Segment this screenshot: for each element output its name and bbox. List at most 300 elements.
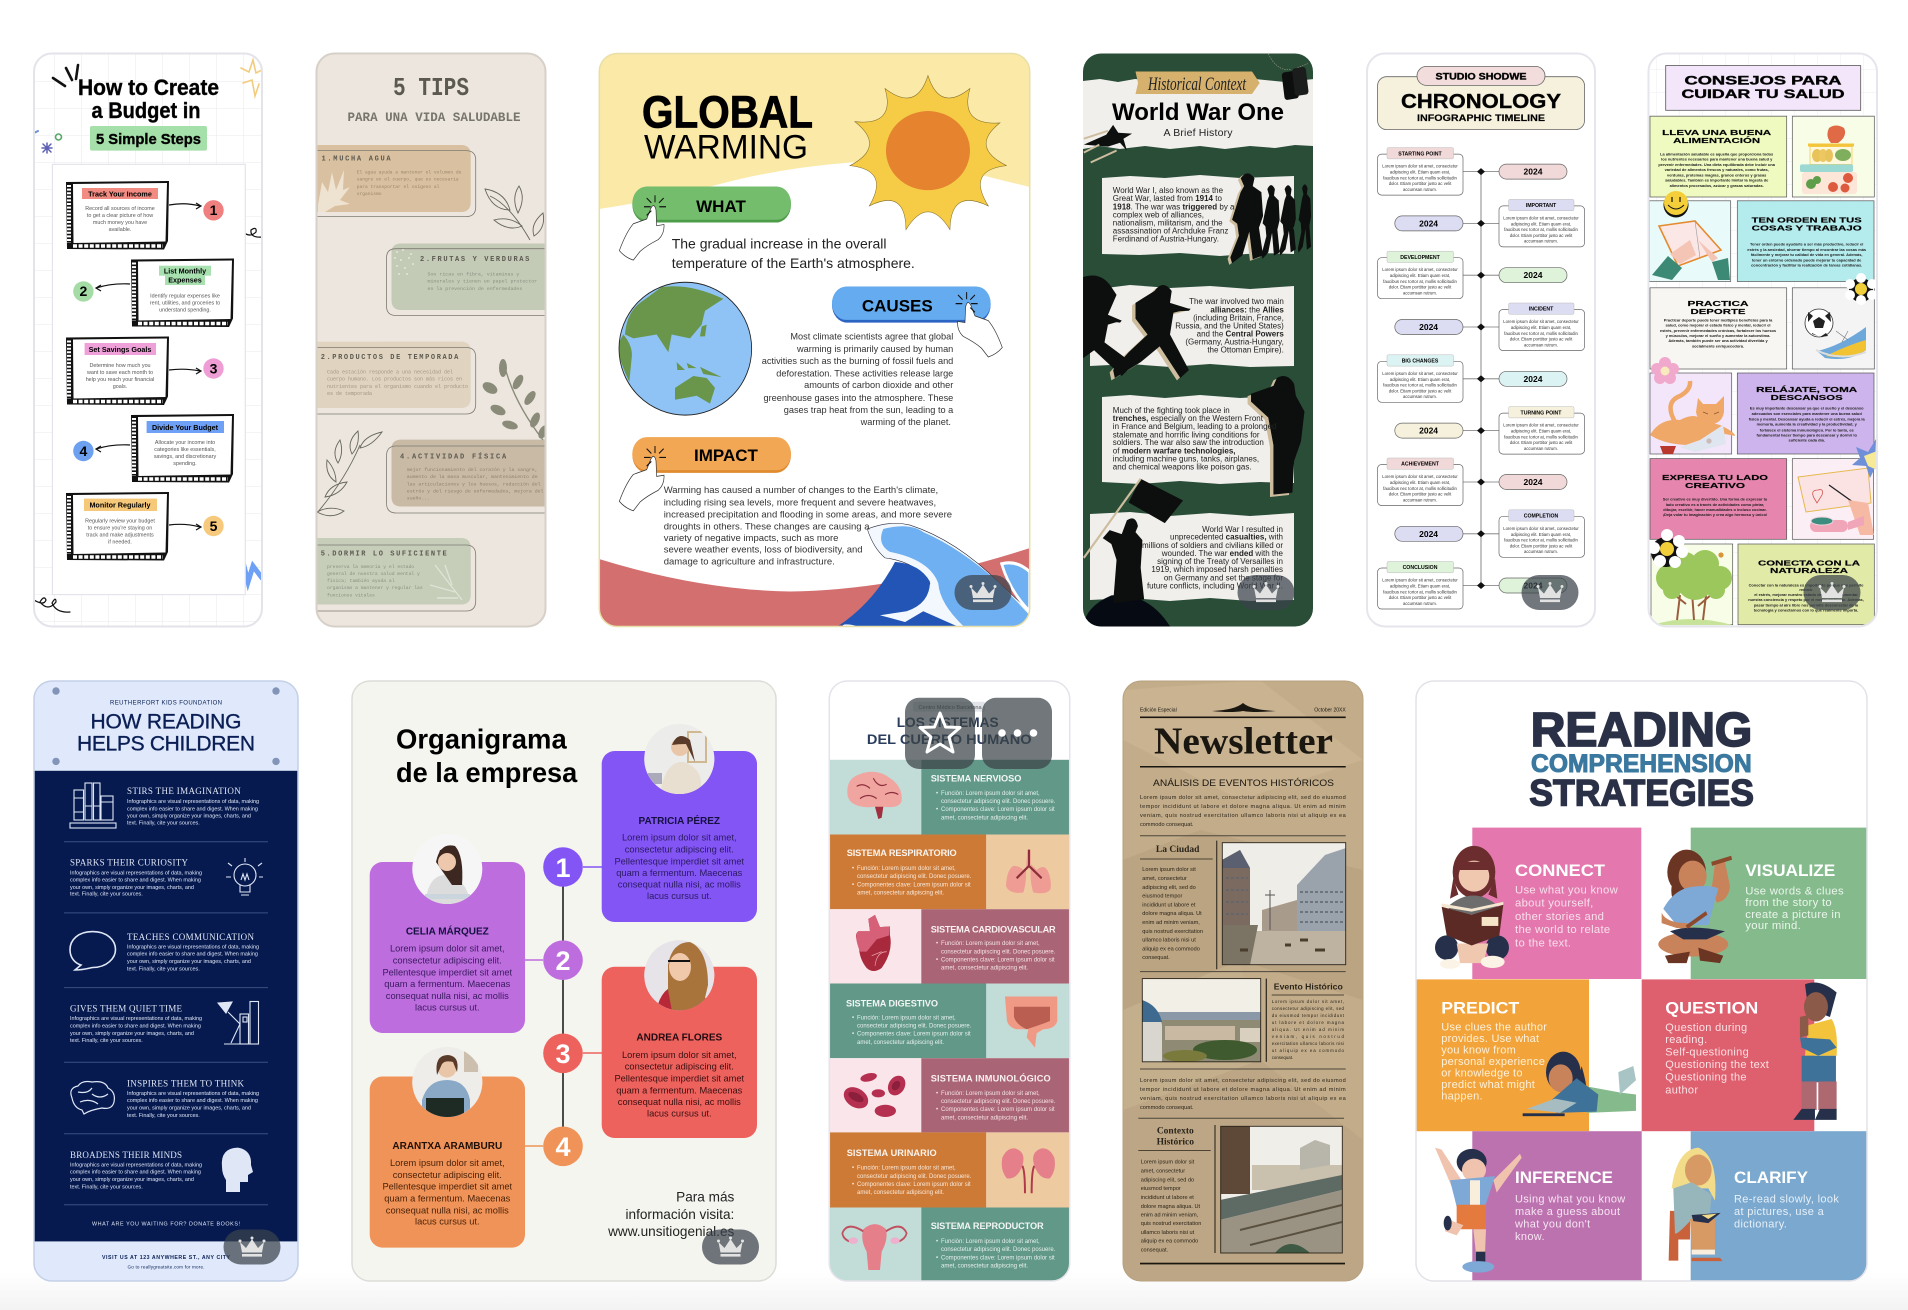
what text: The gradual increase in the overall bbox=[672, 236, 886, 252]
node 2 bbox=[1395, 199, 1584, 247]
intro paragraph: Lorem ipsum dolor sit amet, consectetur adipiscing elit, sed do eiusmod bbox=[1140, 795, 1346, 801]
row 1: your own, simply organize your images, charts, and bbox=[127, 813, 251, 819]
row: respiratorio: amet, consectetur adipiscing elit. bbox=[857, 890, 944, 896]
person card: arantxa: Lorem ipsum dolor sit amet, bbox=[390, 1158, 505, 1168]
tip 2 bbox=[386, 244, 546, 316]
node 8: adipiscing elit. Etiam quam erat, bbox=[1511, 532, 1571, 537]
contexto histórico column: aliquip ex ea commodo bbox=[1141, 1239, 1198, 1245]
node 5: adipiscing elit. Etiam quam erat, bbox=[1390, 377, 1450, 382]
la ciudad column bbox=[1140, 841, 1217, 969]
strategy: clarify: dictionary. bbox=[1734, 1219, 1787, 1231]
tip 4: aumento de la masa muscular, mantenimiento de bbox=[407, 474, 538, 480]
row 3: Infographics are visual representations of data, making bbox=[127, 944, 259, 950]
ww1 paragraphs: of modern warfare technologies, bbox=[1113, 446, 1236, 456]
row: cardiovascular: Componentes clave: Lorem ipsum dolor sit bbox=[941, 957, 1055, 963]
node 8: dolor. Etiam porttitor justo ac velit bbox=[1510, 543, 1573, 548]
step 5: if needed. bbox=[108, 540, 132, 546]
newsletter masthead bbox=[1140, 703, 1346, 789]
health title: CUIDAR TU SALUD bbox=[1682, 89, 1844, 101]
tips title: PARA UNA VIDA SALUDABLE bbox=[348, 110, 521, 125]
tip 5: funciones vitales bbox=[327, 592, 375, 598]
strategy: visualize: Use words & clues bbox=[1745, 886, 1844, 898]
person card: celia: quam a fermentum. Maecenas bbox=[384, 979, 511, 989]
evento histórico column: Evento Histórico bbox=[1274, 982, 1343, 992]
strategy: question: Questioning the bbox=[1665, 1072, 1747, 1084]
tip: alimentación: los nutrientes necesarios para mantener una buena salud y bbox=[1661, 157, 1773, 162]
row: urinario: • bbox=[852, 1166, 854, 1172]
contexto histórico column: ullamco laboris nisi ut bbox=[1141, 1230, 1195, 1236]
step 5: Regularly review your budget bbox=[85, 518, 155, 524]
row: urinario: consectetur adipiscing elit. Donec posuere. bbox=[857, 1174, 972, 1180]
row: reproductor: • bbox=[936, 1255, 938, 1261]
illustration: girl on chair bbox=[1669, 1148, 1723, 1261]
step 5 bbox=[66, 492, 224, 560]
tip: naturaleza: CONECTA CON LA bbox=[1758, 558, 1861, 567]
tip 4: mejor funcionamiento del corazón y la sangre, bbox=[407, 467, 538, 473]
row: respiratorio: consectetur adipiscing elit. Donec posuere. bbox=[857, 874, 972, 880]
tip: creativo: Ser creativo es muy divertido. Una forma de expresar tu bbox=[1663, 497, 1768, 502]
step 4 marker bbox=[543, 1126, 583, 1166]
icon: pink flower bbox=[1651, 357, 1679, 384]
sun bbox=[850, 75, 1007, 230]
strategy: inference: know. bbox=[1515, 1231, 1545, 1243]
node 5: faucibus nec tortor at, mollis sollicitudin bbox=[1383, 383, 1457, 388]
row: digestivo: amet, consectetur adipiscing elit. bbox=[857, 1040, 944, 1046]
contexto histórico column: Lorem ipsum dolor sit bbox=[1141, 1160, 1195, 1166]
node 1: accumsan rutrum. bbox=[1403, 187, 1437, 192]
intro paragraph bbox=[1140, 795, 1347, 828]
row: nervioso: • bbox=[936, 807, 938, 813]
ww1 paragraphs bbox=[1113, 186, 1284, 590]
tip 1: organismo bbox=[357, 191, 382, 197]
tip: orden: estrés y la ansiedad, ahorrar tiempo al encontrar las cosas más bbox=[1747, 247, 1867, 252]
node 1: faucibus nec tortor at, mollis sollicitudin bbox=[1383, 175, 1457, 180]
node 1: 2024 bbox=[1524, 167, 1543, 177]
row: nervioso: • bbox=[936, 791, 938, 797]
tip 1 bbox=[316, 145, 476, 217]
node 4: adipiscing elit. Etiam quam erat, bbox=[1511, 325, 1571, 330]
node 5: BIG CHANGES bbox=[1402, 358, 1439, 364]
tips title: 5 TIPS bbox=[393, 73, 469, 103]
la ciudad column: La Ciudad bbox=[1156, 845, 1200, 855]
tip 4 bbox=[386, 440, 546, 513]
panel: budget steps bbox=[34, 53, 262, 627]
icon: speech bubble bbox=[70, 932, 116, 970]
row: nervioso: SISTEMA NERVIOSO bbox=[931, 773, 1021, 783]
person card: celia: Pellentesque imperdiet sit amet bbox=[382, 967, 513, 977]
contexto histórico column bbox=[1138, 1125, 1215, 1254]
evento histórico column: consequat. bbox=[1272, 1055, 1293, 1060]
tip: deporte: socialmente enriquecedora. bbox=[1692, 344, 1744, 349]
tip: alimentación: saludables. También es importante limitar la ingesta de bbox=[1665, 178, 1769, 183]
step 3 marker bbox=[543, 1034, 583, 1073]
row: digestivo: consectetur adipiscing elit. Donec posuere. bbox=[857, 1024, 972, 1030]
evento histórico column: exercitation ullamco laboris nisi bbox=[1272, 1041, 1344, 1046]
icon: daisy bottom bbox=[1648, 529, 1688, 568]
tip: naturaleza: nuestra conciencia y respeto por el medio ambiente. Además, bbox=[1748, 597, 1864, 602]
panel: health tips bbox=[1648, 53, 1878, 627]
impact text: Warming has caused a number of changes to the Earth's climate, bbox=[664, 485, 938, 496]
row: respiratorio: Componentes clave: Lorem ipsum dolor sit bbox=[857, 882, 971, 888]
tip 2: minerales y tienen un papel protector bbox=[428, 279, 537, 285]
contact text: www.unsitiogenial.es bbox=[607, 1224, 735, 1239]
row 5: complex info easier to share and digest. When making bbox=[127, 1098, 258, 1104]
health title bbox=[1666, 66, 1861, 110]
ww1 paragraphs: World War I, also known as the bbox=[1113, 186, 1224, 195]
step 2: Identify regular expenses like bbox=[150, 294, 220, 300]
strategy: inference: Using what you know bbox=[1515, 1194, 1626, 1206]
person card: patricia: Pellentesque imperdiet sit amet bbox=[614, 856, 745, 866]
tip: descansos: Es muy importante descansar ya que el sueño y el descanso bbox=[1750, 406, 1864, 411]
tip: descansos: suficiente cada día. bbox=[1789, 437, 1825, 442]
decorative doodles bbox=[34, 60, 262, 612]
tip 5: 5.DORMIR LO SUFICIENTE bbox=[321, 550, 448, 558]
strategy: predict: you know from bbox=[1441, 1045, 1516, 1057]
strategy: clarify bbox=[1691, 1131, 1867, 1281]
what text: temperature of the Earth's atmosphere. bbox=[672, 255, 915, 271]
node 1: dolor. Etiam porttitor justo ac velit bbox=[1389, 181, 1452, 186]
strategy: visualize bbox=[1691, 828, 1867, 979]
sistemas title: DEL CUERPO HUMANO bbox=[867, 731, 1032, 747]
tip: alimentación: prevenir enfermedades. Una dieta equilibrada debe incluir una bbox=[1658, 162, 1776, 167]
rules bbox=[1138, 836, 1346, 1118]
impact pill: IMPACT bbox=[694, 446, 759, 465]
row 3: complex info easier to share and digest. When making bbox=[127, 951, 258, 957]
tip: creativo: EXPRESA TU LADO bbox=[1662, 473, 1768, 482]
tip 5 bbox=[316, 538, 476, 611]
tip: alimentación: La alimentación saludable es aquella que proporciona todos bbox=[1660, 151, 1774, 156]
node 4: faucibus nec tortor at, mollis sollicitudin bbox=[1504, 331, 1578, 336]
icon: blue star bbox=[1852, 439, 1877, 478]
tip: descansos: RELÁJATE, TOMA bbox=[1756, 385, 1858, 394]
impact text: increased precipitation and flooding in some areas, and more severe bbox=[664, 510, 952, 520]
la ciudad column: Lorem ipsum dolor sit bbox=[1142, 867, 1196, 873]
photo: elevated train bbox=[1220, 1126, 1343, 1254]
row: urinario: Componentes clave: Lorem ipsum dolor sit bbox=[857, 1182, 971, 1188]
tip 1: 1.MUCHA AGUA bbox=[322, 156, 392, 164]
la ciudad column: eiusmod tempor bbox=[1142, 893, 1183, 899]
person card: arantxa: ARANTXA ARAMBURU bbox=[392, 1141, 502, 1152]
strategy: question: QUESTION bbox=[1665, 999, 1758, 1018]
la ciudad column: aliquip ex ea commodo bbox=[1142, 946, 1200, 952]
illustration: tree bbox=[1651, 544, 1733, 625]
tip: descansos: fortalece el sistema inmunológico. Por lo tanto, es bbox=[1760, 427, 1855, 432]
panel: newsletter bbox=[1123, 680, 1363, 1281]
step 4: Divide Your Budget bbox=[152, 423, 219, 432]
strategy: predict: provides. Use what bbox=[1441, 1033, 1539, 1045]
organ: blood cells bbox=[841, 1072, 909, 1117]
step 2 marker: 2 bbox=[555, 946, 571, 976]
node 9: CONCLUSION bbox=[1403, 565, 1438, 571]
premium badge bbox=[224, 1230, 280, 1264]
reading title: HOW READING bbox=[90, 710, 242, 733]
organigrama title: de la empresa bbox=[396, 757, 578, 788]
row: nervioso: Función: Lorem ipsum dolor sit amet, bbox=[941, 791, 1040, 797]
row 2: text. Finally, cite your sources. bbox=[70, 892, 143, 898]
ww1 paragraphs: complex web of alliances, bbox=[1113, 210, 1204, 219]
strategy: inference: INFERENCE bbox=[1515, 1168, 1613, 1187]
node 6: faucibus nec tortor at, mollis sollicitudin bbox=[1504, 434, 1578, 439]
label: historical context bbox=[1136, 72, 1260, 95]
ww1 paragraphs: millions of soldiers and civilians killed or bbox=[1142, 541, 1283, 550]
what pill bbox=[619, 187, 791, 260]
newsletter masthead: Newsletter bbox=[1154, 721, 1333, 763]
torn paper header bbox=[1083, 78, 1314, 149]
step 5: track and make adjustments bbox=[86, 532, 154, 538]
row: inmunológico: SISTEMA INMUNOLÓGICO bbox=[931, 1072, 1051, 1083]
node 6: TURNING POINT bbox=[1521, 410, 1562, 416]
strategy: predict: PREDICT bbox=[1441, 999, 1520, 1018]
tip: descansos: adecuados son esenciales para mantener una buena salud bbox=[1752, 411, 1862, 416]
tip 2: Son ricas en fibra, vitaminas y bbox=[428, 272, 519, 278]
person card: celia: consectetur adipiscing elit. bbox=[393, 956, 502, 966]
ww1 paragraphs: wounded. The war ended with the bbox=[1162, 549, 1283, 558]
organ: lungs bbox=[1006, 850, 1051, 893]
newsletter masthead: ANÁLISIS DE EVENTOS HISTÓRICOS bbox=[1153, 778, 1334, 789]
person card: andrea: lacus cursus ut. bbox=[647, 1108, 712, 1118]
person card: patricia bbox=[602, 724, 757, 922]
person card: arantxa: quam a fermentum. Maecenas bbox=[384, 1193, 511, 1203]
causes text: Most climate scientists agree that global bbox=[790, 332, 953, 342]
row: inmunológico: • bbox=[936, 1091, 938, 1097]
reading strategies title: STRATEGIES bbox=[1529, 772, 1754, 814]
ww1 paragraphs: Much of the fighting took place in bbox=[1113, 406, 1230, 415]
row 6: complex info easier to share and digest. When making bbox=[70, 1169, 201, 1175]
person card: andrea: ANDREA FLORES bbox=[636, 1033, 722, 1044]
second paragraph: Lorem ipsum dolor sit amet, consectetur adipiscing elit, sed do eiusmod bbox=[1140, 1078, 1346, 1084]
panel: chronology timeline bbox=[1367, 53, 1595, 627]
row 1: text. Finally, cite your sources. bbox=[127, 821, 200, 827]
person card: arantxa: consectetur adipiscing elit. bbox=[393, 1170, 502, 1180]
strategy: predict: personal experience bbox=[1441, 1056, 1545, 1068]
strategy: connect: the world to relate bbox=[1515, 924, 1610, 936]
tip: descansos: memoria, aumenta la creatividad y la productividad, y bbox=[1757, 421, 1858, 426]
step 3 bbox=[66, 336, 224, 405]
tip: deporte: salud, como mejorar el estado físico y mental, reducir el bbox=[1665, 323, 1771, 328]
row: respiratorio bbox=[829, 834, 1070, 909]
strategy: clarify: Re-read slowly, look bbox=[1734, 1194, 1839, 1206]
footer: Go to reallygreatsite.com for more. bbox=[128, 1264, 204, 1269]
ww1 paragraphs: the Ottoman Empire). bbox=[1207, 346, 1284, 355]
evento histórico column: ut labore et dolore magna bbox=[1272, 1020, 1345, 1025]
row: cardiovascular: amet, consectetur adipiscing elit. bbox=[941, 966, 1028, 972]
node 3: 2024 bbox=[1524, 270, 1543, 280]
icon: head bbox=[222, 1148, 253, 1192]
row 6: your own, simply organize your images, charts, and bbox=[70, 1177, 194, 1183]
row: reproductor: • bbox=[936, 1239, 938, 1245]
row 3 bbox=[127, 932, 259, 972]
person card: patricia: PATRICIA PÉREZ bbox=[639, 814, 720, 827]
node 2: Lorem ipsum dolor sit amet, consectetur bbox=[1503, 215, 1579, 220]
tip 3: cuerpo humano. Los productos son más ricos en bbox=[327, 377, 462, 383]
step 2: 2 bbox=[80, 283, 88, 299]
strategy: predict: happen. bbox=[1441, 1090, 1483, 1102]
evento histórico column: Lorem ipsum dolor sit amet, bbox=[1272, 999, 1344, 1004]
contact text: información visita: bbox=[626, 1207, 734, 1222]
tip: orden bbox=[1737, 201, 1874, 282]
step 1: Record all sources of income bbox=[85, 206, 155, 212]
node 2: IMPORTANT bbox=[1526, 203, 1557, 209]
tip: alimentación: LLEVA UNA BUENA bbox=[1662, 128, 1772, 137]
row: urinario: amet, consectetur adipiscing elit. bbox=[857, 1190, 944, 1196]
row: nervioso: amet, consectetur adipiscing elit. bbox=[941, 815, 1028, 821]
title: global warming bbox=[643, 96, 812, 159]
row: urinario: • bbox=[852, 1182, 854, 1188]
strategy: connect bbox=[1472, 828, 1641, 979]
plant: outlined branch upper bbox=[485, 186, 544, 240]
node 3: faucibus nec tortor at, mollis sollicitudin bbox=[1383, 279, 1457, 284]
illustration: child with crayons bbox=[1658, 850, 1732, 963]
tip 3: nutrientes para el organismo cuando el producto bbox=[327, 384, 468, 390]
ww1 paragraphs: and chemical weapons like poison gas. bbox=[1113, 462, 1252, 471]
impact pill bbox=[619, 437, 791, 511]
tip: creativo: CREATIVO bbox=[1685, 481, 1745, 490]
strategy: visualize: create a picture in bbox=[1745, 909, 1841, 921]
contexto histórico column: enim ad minim veniam, bbox=[1141, 1212, 1199, 1218]
impact text: severe weather events, loss of biodiversity, and bbox=[664, 545, 863, 556]
step 1 marker: 1 bbox=[555, 853, 571, 883]
row 4 bbox=[70, 1004, 202, 1044]
panel: organigrama bbox=[352, 681, 776, 1281]
step 1 bbox=[66, 181, 224, 250]
node 1: adipiscing elit. Etiam quam erat, bbox=[1390, 170, 1450, 175]
title: global warming: GLOBAL bbox=[642, 87, 813, 138]
strategy: visualize: from the story to bbox=[1745, 897, 1832, 909]
node 5 bbox=[1378, 355, 1567, 402]
row: cardiovascular: consectetur adipiscing elit. Donec posuere. bbox=[941, 949, 1056, 955]
reading title bbox=[77, 700, 255, 755]
row 2: SPARKS THEIR CURIOSITY bbox=[70, 858, 188, 868]
step 3 marker: 3 bbox=[555, 1039, 571, 1069]
tips title bbox=[348, 78, 520, 121]
step 4: savings, and discretionary bbox=[154, 454, 216, 460]
strategy: visualize: your mind. bbox=[1745, 920, 1801, 932]
node 9: adipiscing elit. Etiam quam erat, bbox=[1390, 584, 1450, 588]
step 4 bbox=[73, 414, 234, 482]
tip 4: estrés y del riesgo de enfermedades, mejora del bbox=[407, 488, 544, 494]
strategy: predict: Use clues the author bbox=[1441, 1021, 1547, 1033]
step 5: Monitor Regularly bbox=[89, 501, 151, 510]
la ciudad column: incididunt ut labore et bbox=[1142, 902, 1196, 908]
footer bbox=[102, 1255, 231, 1269]
row 4: GIVES THEM QUIET TIME bbox=[70, 1004, 182, 1014]
node 9: dolor. Etiam porttitor justo ac velit bbox=[1389, 595, 1452, 600]
tip: creativo: ¡Deja volar tu imaginación y crea algo hermoso y único! bbox=[1663, 512, 1767, 517]
second paragraph bbox=[1140, 1078, 1347, 1111]
row: inmunológico: Función: Lorem ipsum dolor sit amet, bbox=[941, 1091, 1040, 1097]
organ: reproductive bbox=[842, 1224, 907, 1270]
ww1 paragraphs: future conflicts, including World War II. bbox=[1147, 581, 1283, 590]
node 9 bbox=[1378, 562, 1567, 609]
node 2: faucibus nec tortor at, mollis sollicitudin bbox=[1504, 227, 1578, 232]
label: historical context: Historical Context bbox=[1147, 74, 1247, 95]
ww1 paragraphs: Great War, lasted from 1914 to bbox=[1113, 194, 1222, 203]
tip: orden: TEN ORDEN EN TUS bbox=[1752, 216, 1862, 225]
step 2 bbox=[73, 258, 234, 327]
tip 2: en la prevención de enfermedades bbox=[428, 286, 522, 292]
tip: naturaleza bbox=[1738, 544, 1874, 625]
person card: patricia: consequat nulla nisi, ac mollis bbox=[618, 880, 741, 890]
contexto histórico column: quis nostrud exercitation bbox=[1141, 1221, 1201, 1227]
row 3: text. Finally, cite your sources. bbox=[127, 966, 200, 972]
row: inmunológico: Componentes clave: Lorem ipsum dolor sit bbox=[941, 1107, 1055, 1113]
node 6: adipiscing elit. Etiam quam erat, bbox=[1511, 429, 1571, 434]
row 2: Infographics are visual representations of data, making bbox=[70, 870, 202, 876]
row 3: your own, simply organize your images, charts, and bbox=[127, 959, 251, 965]
step 4: spending. bbox=[173, 461, 197, 467]
tip 5: organismo a mantener y regular las bbox=[327, 585, 423, 591]
node 2: accumsan rutrum. bbox=[1524, 239, 1558, 244]
node 7: adipiscing elit. Etiam quam erat, bbox=[1390, 480, 1450, 485]
tip: orden: fácilmente y mejorar tu calidad de vida en general. Además, bbox=[1751, 252, 1863, 257]
strategy: predict bbox=[1416, 979, 1589, 1131]
illustration: thinking boy bbox=[1793, 982, 1837, 1120]
la ciudad column: enim ad minim veniam, bbox=[1142, 920, 1200, 926]
strategy: inference bbox=[1472, 1131, 1642, 1281]
tip 3: 2.PRODUCTOS DE TEMPORADA bbox=[321, 354, 460, 362]
ww1 paragraphs: (including Britain, France, bbox=[1193, 314, 1284, 323]
tip 1: sangre en el cuerpo, que es necesaria bbox=[357, 177, 459, 183]
causes text: warming is primarily caused by human bbox=[796, 344, 953, 354]
person card: patricia: lacus cursus ut. bbox=[647, 891, 712, 901]
tip: deporte: y músculos, mejorar el sueño y aumentar la autoestima. bbox=[1666, 333, 1770, 338]
row: reproductor: Función: Lorem ipsum dolor sit amet, bbox=[941, 1239, 1040, 1245]
organ: kidneys bbox=[1002, 1148, 1055, 1193]
person card: andrea bbox=[602, 940, 757, 1138]
illustration: food box bbox=[1792, 116, 1874, 197]
illustration: jumping kid bbox=[1435, 1148, 1522, 1273]
causes text: greenhouse gases into the atmosphere. These bbox=[763, 393, 953, 403]
premium badge bbox=[954, 575, 1012, 610]
node 4: dolor. Etiam porttitor justo ac velit bbox=[1510, 336, 1573, 342]
tip: descansos: física y mental. Descansar ayuda a reducir el estrés, mejora la bbox=[1749, 416, 1866, 421]
step 1 marker bbox=[543, 847, 583, 887]
tip: naturaleza: reducir bbox=[1799, 587, 1813, 592]
timeline spine bbox=[1480, 172, 1482, 586]
causes pill bbox=[832, 287, 1002, 357]
ww1 paragraphs: signing of the Treaty of Versailles in bbox=[1157, 557, 1283, 566]
node 7: 2024 bbox=[1524, 477, 1543, 487]
strategy: clarify: CLARIFY bbox=[1734, 1168, 1809, 1187]
ww1 paragraphs: nationalism, militarism, and the bbox=[1113, 219, 1223, 228]
node 3: DEVELOPMENT bbox=[1400, 255, 1441, 261]
tip: descansos bbox=[1737, 373, 1874, 454]
strategy: inference: what you don't bbox=[1514, 1219, 1590, 1231]
node 7 bbox=[1378, 458, 1567, 506]
ww1 paragraphs: assassination of Archduke Franz bbox=[1113, 227, 1228, 236]
tip: orden: Tener orden puede ayudarte a ser más productivo, reducir el bbox=[1750, 242, 1863, 247]
step 5: to ensure you're staying on bbox=[88, 526, 152, 532]
tip: creativo: lado creativo es a través de actividades como pintar, bbox=[1666, 502, 1764, 507]
premium badge bbox=[1522, 575, 1578, 610]
person card: celia: lacus cursus ut. bbox=[415, 1002, 480, 1012]
node 8: faucibus nec tortor at, mollis sollicitudin bbox=[1504, 538, 1578, 543]
row: urinario bbox=[829, 1132, 1070, 1208]
row 1 bbox=[127, 786, 259, 827]
person card: patricia: Lorem ipsum dolor sit amet, bbox=[622, 833, 737, 843]
step 4: categories like essentials, bbox=[154, 447, 216, 453]
organigrama title: Organigrama bbox=[396, 723, 567, 754]
chronology header: CHRONOLOGY bbox=[1401, 91, 1562, 113]
panel: reading comprehension strategies bbox=[1416, 681, 1867, 1281]
tip 4: sueño... bbox=[407, 496, 430, 502]
node 1: Lorem ipsum dolor sit amet, consectetur bbox=[1382, 164, 1458, 169]
strategy: connect: to the text. bbox=[1515, 937, 1571, 949]
ww1 paragraphs: alliances: the Allies bbox=[1210, 305, 1284, 314]
step 2: Expenses bbox=[168, 276, 202, 284]
health title: CONSEJOS PARA bbox=[1684, 76, 1842, 88]
row: digestivo: • bbox=[852, 1015, 854, 1021]
